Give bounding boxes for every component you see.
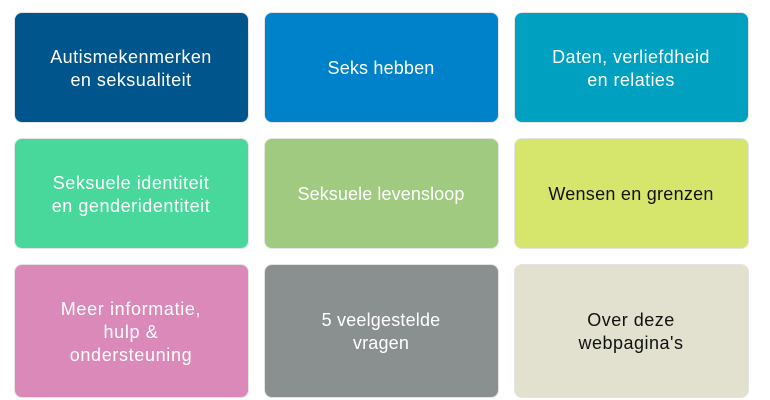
panel: Over deze webpagina's xyxy=(514,264,749,398)
panel: 5 veelgestelde vragen xyxy=(264,264,499,398)
panel: Autismekenmerken en seksualiteit: Autismekenmerken xyxy=(50,46,212,66)
panel: 5 veelgestelde vragen: 5 veelgestelde xyxy=(322,310,440,330)
panel: Meer informatie, hulp & ondersteuning: Meer informatie, xyxy=(61,298,201,318)
panel: 5 veelgestelde vragen: vragen xyxy=(353,333,409,353)
panel: Daten, verliefdheid en relaties: en relaties xyxy=(587,70,675,90)
panel: Over deze webpagina's: Over deze xyxy=(587,310,675,330)
panel: Seksuele identiteit en genderidentiteit: en genderidentiteit xyxy=(52,196,210,216)
panel: Meer informatie, hulp & ondersteuning: hulp & xyxy=(104,322,158,342)
panel: Autismekenmerken en seksualiteit: en seksualiteit xyxy=(70,70,192,90)
panel: Meer informatie, hulp & ondersteuning xyxy=(14,264,249,398)
panel: Seksuele levensloop: Seksuele levensloop xyxy=(297,184,464,204)
panel: Wensen en grenzen xyxy=(514,138,749,249)
panel: Autismekenmerken en seksualiteit xyxy=(14,12,249,123)
panel: Seksuele identiteit en genderidentiteit xyxy=(14,138,249,249)
panel: Wensen en grenzen: Wensen en grenzen xyxy=(548,184,714,204)
panel: Over deze webpagina's: webpagina's xyxy=(578,333,684,353)
panel: Seksuele identiteit en genderidentiteit: Seksuele identiteit xyxy=(53,172,209,192)
panel: Meer informatie, hulp & ondersteuning: ondersteuning xyxy=(70,344,192,364)
panel: Seks hebben xyxy=(264,12,499,123)
panel: Seks hebben: Seks hebben xyxy=(328,58,434,78)
panel: Seksuele levensloop xyxy=(264,138,499,249)
panel: Daten, verliefdheid en relaties xyxy=(514,12,749,123)
panel: Daten, verliefdheid en relaties: Daten, verliefdheid xyxy=(552,46,710,66)
